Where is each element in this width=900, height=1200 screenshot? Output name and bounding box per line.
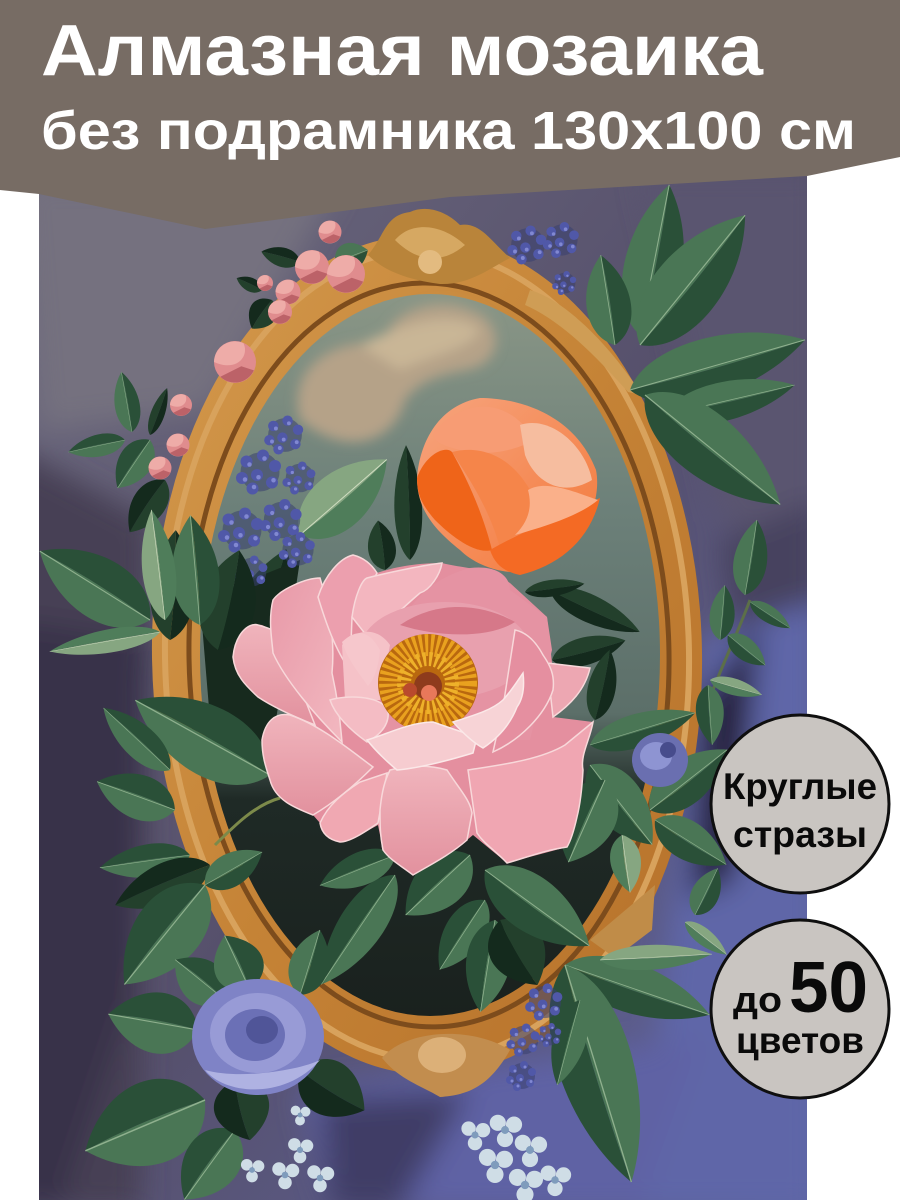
leaf group: below the large peony xyxy=(303,837,606,1015)
stamen base xyxy=(378,634,478,732)
leaf group: right branch xyxy=(694,517,795,746)
lilac sprig inside frame xyxy=(218,416,315,588)
pink buds: left of frame xyxy=(148,341,256,480)
lilac sprig: top right of frame xyxy=(507,222,579,295)
outer petal: left xyxy=(233,625,315,725)
leaves behind the flowers inside the frame xyxy=(200,439,646,780)
lower orange petal xyxy=(490,498,600,575)
lower small petal xyxy=(320,773,387,842)
leaf group: left large xyxy=(24,508,266,663)
lilac sprig: bottom of frame xyxy=(506,983,562,1091)
orange peony xyxy=(417,398,600,575)
right mid petal xyxy=(493,630,553,752)
cup interior xyxy=(360,602,530,698)
badge: up to 50 colours: до xyxy=(733,979,782,1020)
white flower sprig: bottom left xyxy=(241,1106,334,1192)
leaf group: right middle xyxy=(543,697,741,961)
leaf group: bottom left xyxy=(85,930,364,1200)
outer petal: top xyxy=(352,563,442,640)
upper peach petals xyxy=(434,407,535,453)
centre orange petal xyxy=(452,450,531,548)
oval painted sky interior xyxy=(200,294,660,1016)
right collar petal xyxy=(453,673,524,748)
flower carpels xyxy=(414,672,442,700)
outer petal: right xyxy=(547,663,590,717)
stamens xyxy=(390,645,466,721)
bottom centre petal xyxy=(380,766,472,875)
clouds xyxy=(297,304,496,442)
pink buds: top of frame xyxy=(257,220,365,324)
peony silhouette base xyxy=(233,555,593,875)
top ornament xyxy=(368,209,510,284)
dark orange left petal xyxy=(417,450,492,551)
right upper ornament xyxy=(525,290,642,395)
leaf group: middle left xyxy=(89,670,287,1005)
leaf group: top right xyxy=(579,179,813,529)
inner left fold xyxy=(342,632,390,700)
badge: up to 50 colours: 50 xyxy=(789,948,868,1028)
outer petal: tall left xyxy=(271,578,342,742)
leaf group: upper left sprig xyxy=(66,370,179,542)
peach right petal xyxy=(515,486,598,535)
badge: round rhinestones xyxy=(711,715,889,893)
badge: up to 50 colours xyxy=(711,920,889,1098)
oval gilded frame xyxy=(145,209,709,1097)
outer petal: upper left xyxy=(318,555,377,670)
large blue peony: bottom left xyxy=(192,979,324,1095)
title banner xyxy=(0,0,900,229)
cloth folds xyxy=(0,170,820,1200)
left collar petals xyxy=(330,697,388,742)
big lower right petal xyxy=(468,722,593,863)
small blue flower: right xyxy=(632,733,688,787)
leaf group: lower right xyxy=(529,941,718,1193)
large pink peony xyxy=(233,555,593,875)
badge: round rhinestones: Круглые xyxy=(723,766,877,807)
back cup petal xyxy=(345,567,552,740)
badge: up to 50 colours: цветов xyxy=(736,1020,864,1061)
white flower sprig: bottom center xyxy=(461,1115,571,1200)
badge: round rhinestones: стразы xyxy=(733,814,867,855)
bottom ornament xyxy=(382,1034,510,1097)
leaves behind the pink buds xyxy=(234,237,373,337)
title line 1: Алмазная мозаика xyxy=(41,11,764,91)
painting: draped cloth background xyxy=(0,170,820,1200)
lower right ornament xyxy=(590,885,655,958)
front collar petal xyxy=(367,722,477,770)
bottom left petal xyxy=(262,714,373,815)
title line 2: без подрамника 130х100 см xyxy=(41,101,856,161)
